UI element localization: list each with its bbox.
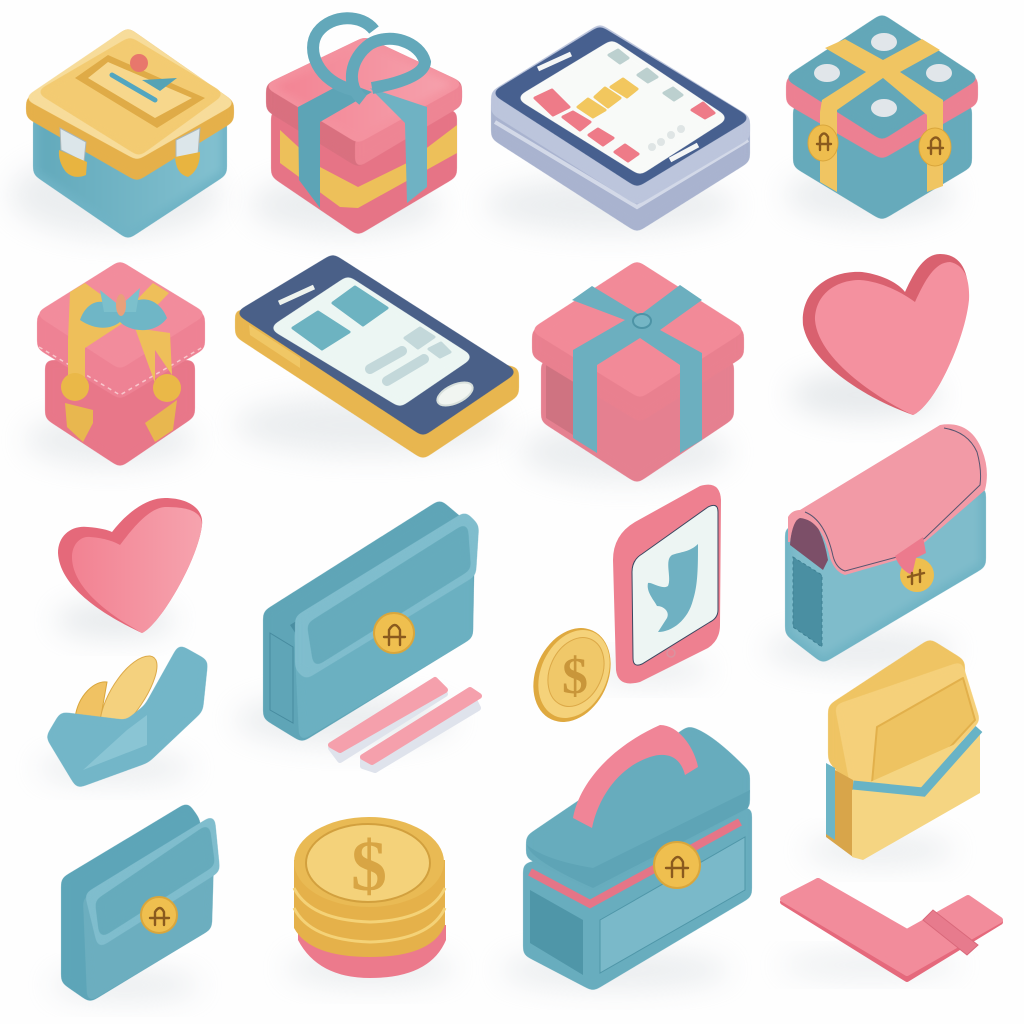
icon: teal box with yellow cross <box>785 17 975 223</box>
icon: teal small wallet <box>50 806 217 1001</box>
icon: pink gift with bow <box>25 264 203 466</box>
icon: pink strap <box>780 881 1000 979</box>
icon: coin stack <box>285 817 455 986</box>
icon: tablet stack <box>485 27 748 233</box>
icon: teal wallet large <box>235 503 476 746</box>
icon: coin stack: $ <box>351 826 387 906</box>
icon: pink gift with teal ribbon <box>250 18 459 235</box>
icon: pink bars <box>331 680 479 770</box>
icon: pink gift with teal band <box>520 264 741 482</box>
icon: coin beside phone <box>519 615 625 735</box>
icon: pink flap purse <box>765 424 987 672</box>
icon: yellow lid box <box>10 31 231 237</box>
icon: teal pouch with coins <box>37 648 205 785</box>
icon: heart small <box>55 498 202 638</box>
icon: yellow envelope wallet <box>805 642 980 866</box>
icon: teal toolbox with handle <box>500 725 750 990</box>
icon: phone with bird <box>590 485 721 684</box>
icon: heart large <box>790 254 969 419</box>
icon: coin beside phone: $ <box>562 648 588 705</box>
icon: smartphone landscape <box>235 257 516 456</box>
